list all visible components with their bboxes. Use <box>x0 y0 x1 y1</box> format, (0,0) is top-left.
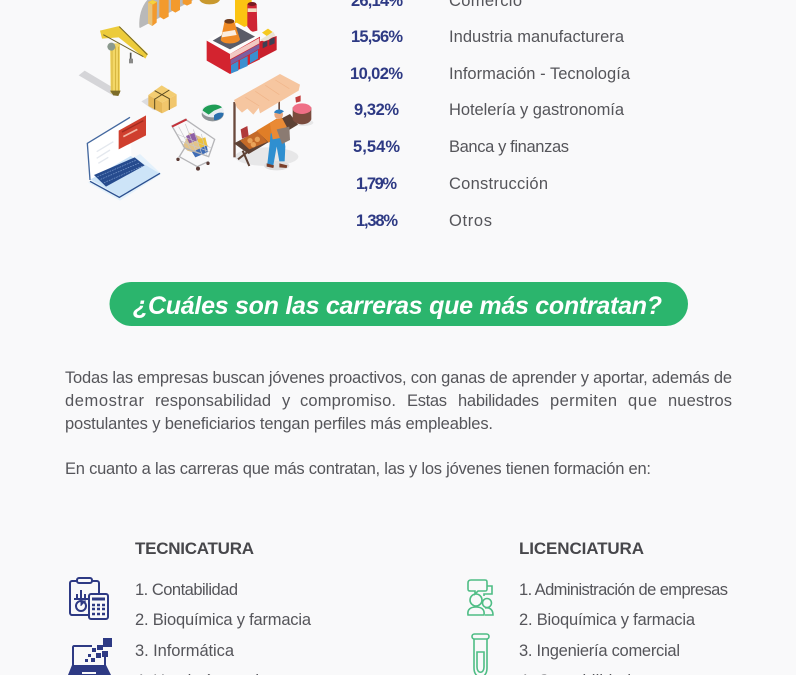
heading: tecnicatura: TECNICATURA <box>135 539 254 558</box>
icon: pie chart disc <box>202 104 224 121</box>
icon: tower crane <box>79 26 148 96</box>
list: licenciatura careers <box>519 581 728 675</box>
row: informacion: Información - Tecnología <box>449 65 631 83</box>
intro paragraph: habilidades <box>458 392 539 410</box>
column: tecnicatura <box>68 539 312 675</box>
list: tecnicatura careers <box>135 581 312 675</box>
row: construccion: 1,79% <box>356 175 397 193</box>
row: banca <box>353 138 569 156</box>
intro paragraph: y <box>282 392 291 410</box>
row: construccion: Construcción <box>449 175 548 193</box>
row: construccion <box>356 175 548 193</box>
row: informacion <box>350 65 631 83</box>
row: hoteleria: Hotelería y gastronomía <box>449 101 625 119</box>
icon: people with speech bubbles <box>468 580 493 615</box>
row: otros: 1,38% <box>356 212 398 230</box>
icon: credit card <box>119 115 146 149</box>
sector table <box>350 0 631 230</box>
row: hoteleria <box>354 101 625 119</box>
row: industria <box>351 28 625 46</box>
icon: laptop <box>87 117 161 201</box>
intro paragraph: demostrar <box>65 392 144 410</box>
intro paragraph: nuestros <box>668 392 732 410</box>
intro paragraph: Estas <box>407 392 447 410</box>
row: banca: 5,54% <box>353 138 400 156</box>
row: otros <box>356 212 492 230</box>
intro paragraph: Todas las empresas buscan jóvenes proactivos, con ganas de aprender y aportar, además de <box>65 369 732 387</box>
intro paragraph: compromiso. <box>300 392 396 410</box>
icon: cardboard box <box>141 85 177 113</box>
row: hoteleria: 9,32% <box>354 101 399 119</box>
icon: factory <box>207 0 277 74</box>
row: banca: Banca y finanzas <box>449 138 569 156</box>
icon: test tube <box>472 634 489 675</box>
heading banner <box>110 282 688 326</box>
intro sentence: En cuanto a las carreras que más contratan, las y los jóvenes tienen formación en: <box>65 460 651 478</box>
intro paragraph: permiten <box>550 392 617 410</box>
list: licenciatura careers: 3. Ingeniería comercial <box>519 642 680 660</box>
heading: licenciatura: LICENCIATURA <box>519 539 644 558</box>
icon: market stall with vendor <box>233 74 313 170</box>
icon: shopping cart <box>172 119 215 171</box>
row: comercio <box>351 0 522 10</box>
list: tecnicatura careers: 2. Bioquímica y farmacia <box>135 611 312 629</box>
heading banner: ¿Cuáles son las carreras que más contratan? <box>133 292 662 320</box>
row: otros: Otros <box>449 212 492 230</box>
row: informacion: 10,02% <box>350 65 403 83</box>
illustration: economic sectors <box>79 0 313 201</box>
intro paragraph: responsabilidad <box>155 392 271 410</box>
icon: clipboard and calculator <box>70 578 108 619</box>
list: licenciatura careers: 2. Bioquímica y farmacia <box>519 611 696 629</box>
icon: laptop with pixels <box>68 638 112 675</box>
intro paragraph: postulantes y beneficiarios tengan perfiles más empleables. <box>65 415 493 433</box>
row: industria: Industria manufacturera <box>449 28 625 46</box>
list: tecnicatura careers: 1. Contabilidad <box>135 581 238 599</box>
intro paragraph: que <box>628 392 657 410</box>
list: licenciatura careers: 1. Administración de empresas <box>519 581 728 599</box>
row: industria: 15,56% <box>351 28 403 46</box>
list: tecnicatura careers: 3. Informática <box>135 642 235 660</box>
column: licenciatura <box>468 539 728 675</box>
intro paragraph <box>65 369 732 433</box>
icon: orange bar chart <box>139 0 220 28</box>
